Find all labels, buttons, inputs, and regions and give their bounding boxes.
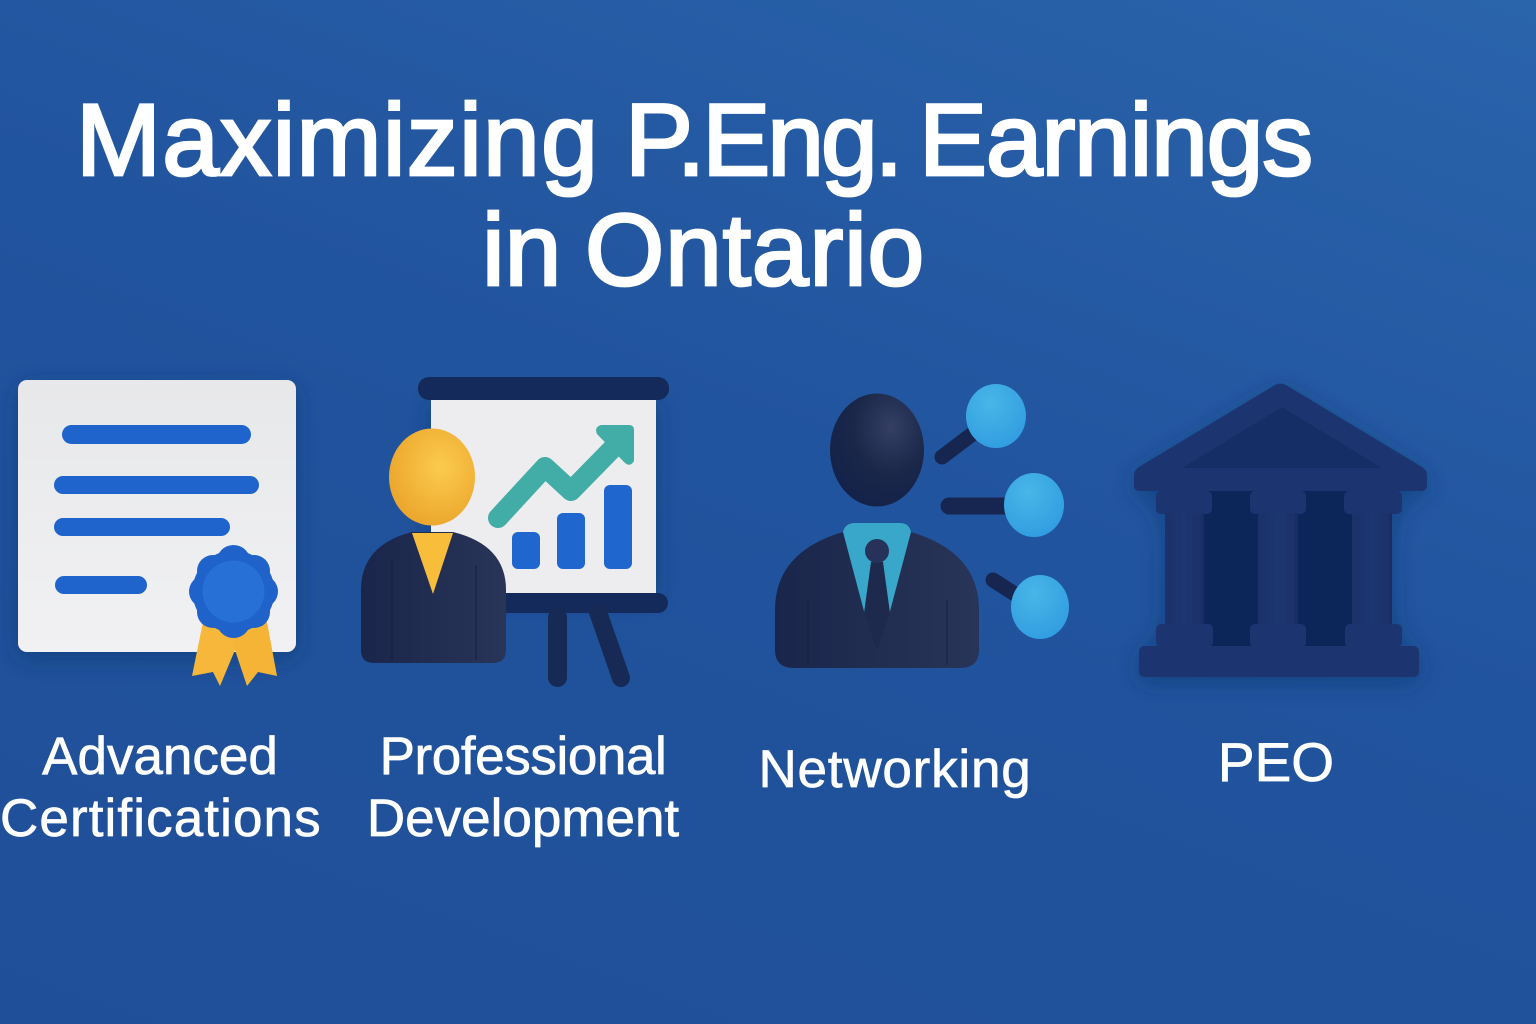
- icon: PEO building: [1134, 384, 1427, 677]
- icon: presenter with chart: [361, 377, 669, 687]
- seal: [189, 545, 278, 638]
- label: professional development: [367, 727, 680, 848]
- title: in: [482, 193, 561, 307]
- icon: networking person: [775, 384, 1069, 668]
- label: professional development: Professional: [380, 727, 666, 786]
- label: PEO: PEO: [1218, 731, 1334, 793]
- certificate card: [18, 380, 296, 652]
- head: [830, 394, 924, 506]
- label: advanced certifications: [0, 727, 322, 848]
- label: advanced certifications: Advanced: [42, 727, 278, 786]
- title: [76, 83, 1312, 307]
- connectors: [942, 432, 1018, 596]
- board top bar: [418, 377, 669, 400]
- title: Ontario: [585, 193, 925, 307]
- icon: certificate: [18, 380, 296, 686]
- text lines: [54, 425, 259, 594]
- label: networking: Networking: [758, 740, 1032, 799]
- label: advanced certifications: Certifications: [0, 789, 322, 848]
- shirt: [843, 523, 911, 615]
- suit body: [775, 532, 979, 668]
- title: Earnings: [919, 83, 1312, 197]
- columns: [1156, 491, 1402, 647]
- presenter head: [389, 428, 475, 526]
- roof: [1134, 384, 1427, 491]
- bar chart: [512, 485, 632, 569]
- tie: [864, 539, 890, 650]
- title: P.Eng.: [625, 83, 900, 197]
- pediment: [1182, 407, 1382, 468]
- label: professional development: Development: [367, 789, 679, 848]
- presenter body: [361, 532, 506, 663]
- title: Maximizing: [76, 83, 599, 197]
- back wall: [1204, 490, 1352, 646]
- growth arrow: [498, 425, 634, 518]
- board tray and legs: [490, 593, 668, 687]
- plinth: [1139, 646, 1419, 677]
- board: [431, 398, 656, 594]
- ribbon: [192, 622, 277, 686]
- nodes: [966, 384, 1069, 639]
